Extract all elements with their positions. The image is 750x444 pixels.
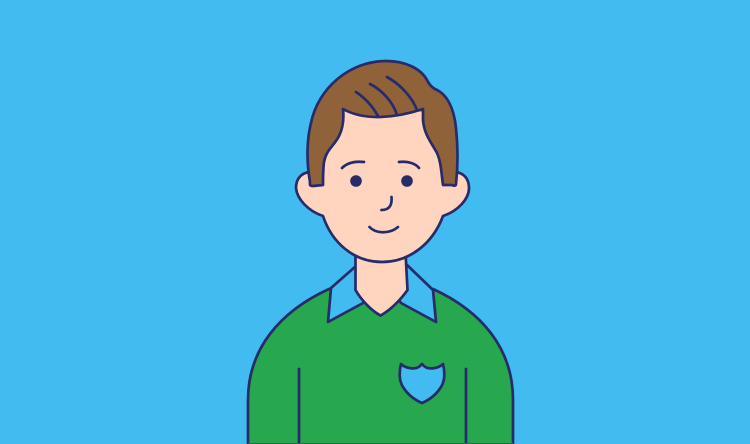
right eye (401, 175, 413, 187)
bottom edge shadow (248, 443, 513, 444)
hair strand 2 (370, 84, 397, 115)
left eyebrow (342, 162, 364, 168)
shirt collar (328, 264, 436, 322)
sweater (248, 289, 513, 444)
right collar (392, 264, 436, 322)
head with ears (296, 110, 469, 262)
left sleeve seam (298, 369, 300, 444)
hair strand 3 (356, 92, 378, 116)
right eyebrow (399, 162, 419, 168)
neck (356, 252, 408, 316)
left collar (328, 266, 372, 322)
hair (308, 61, 458, 186)
nose (382, 197, 392, 210)
right sleeve seam (465, 369, 467, 444)
emblem: shield badge (400, 364, 444, 403)
smile (370, 227, 398, 232)
hair strand 1 (387, 77, 417, 110)
left eye (350, 175, 362, 187)
